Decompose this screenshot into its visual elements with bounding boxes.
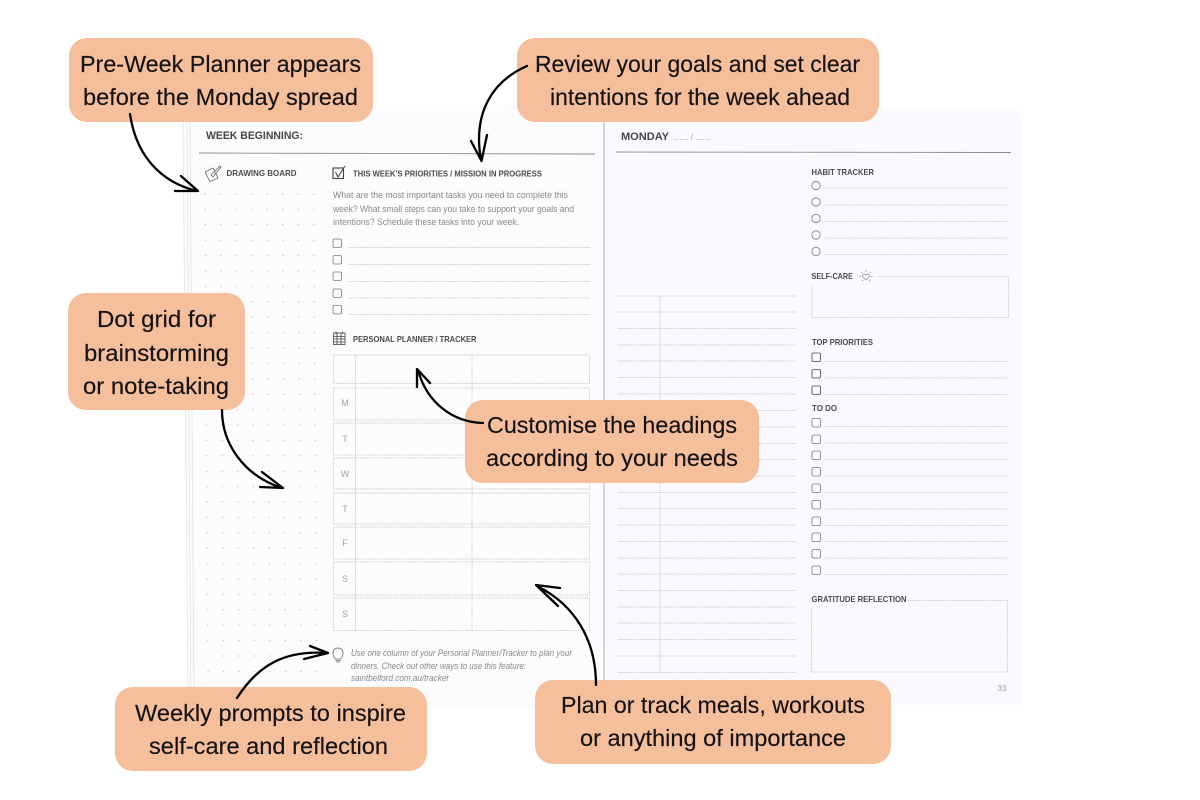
callout: review goals <box>517 38 879 122</box>
planner table: W <box>341 469 350 479</box>
self-care box: SELF-CARE <box>812 271 853 281</box>
planner spread <box>183 105 1021 707</box>
personal planner section: PERSONAL PLANNER / TRACKER <box>353 334 476 344</box>
top priorities <box>812 337 1008 394</box>
to do list <box>812 403 1008 574</box>
callout: customise headings: Customise the headings <box>487 412 737 438</box>
left page <box>183 105 604 707</box>
gratitude reflection box <box>812 594 1008 672</box>
drawing board section: DRAWING BOARD <box>226 168 296 178</box>
page number: 33 <box>998 684 1007 693</box>
planner table: T <box>342 504 348 514</box>
icon: light bulb <box>333 648 343 662</box>
arrow: pre-week planner to left page <box>130 114 198 191</box>
top priorities: TOP PRIORITIES <box>812 337 873 347</box>
callout: weekly prompts: self-care and reflection <box>149 733 388 759</box>
icon: pencil on paper <box>205 166 221 182</box>
priorities prompt: intentions? Schedule these tasks into your week. <box>333 216 519 227</box>
icon: sun with heart <box>860 270 872 281</box>
callout: dot grid: or note-taking <box>83 373 229 399</box>
icon: calendar <box>334 332 345 344</box>
weekly prompt <box>333 648 573 683</box>
right page: ....... / ....... <box>673 133 711 142</box>
priorities section <box>332 166 590 314</box>
self-care box <box>812 270 1008 318</box>
priorities checklist <box>333 239 590 314</box>
arrow: review goals to priorities <box>471 66 527 161</box>
arrow: customise callout to headings <box>417 369 483 423</box>
priorities prompt: What are the most important tasks you need to complete this <box>333 189 568 200</box>
personal planner section <box>334 332 590 630</box>
callout: weekly prompts <box>115 687 427 771</box>
callout: dot grid <box>68 293 245 410</box>
callout: plan or track: Plan or track meals, workouts <box>561 692 865 718</box>
weekly prompt: saintbelford.com.au/tracker <box>351 673 450 683</box>
weekly prompt: Use one column of your Personal Planner/Tracker to plan your <box>351 648 573 658</box>
callout: plan or track <box>535 680 891 764</box>
habit tracker <box>812 167 1008 256</box>
priorities section: THIS WEEK'S PRIORITIES / MISSION IN PROGRESS <box>353 168 542 178</box>
drawing board section <box>200 166 320 680</box>
right page <box>604 109 1021 705</box>
habit tracker: HABIT TRACKER <box>812 167 874 177</box>
gratitude reflection box: GRATITUDE REFLECTION <box>812 594 906 604</box>
callout: customise headings: according to your needs <box>486 445 738 471</box>
priorities prompt <box>332 189 574 227</box>
to do list: TO DO <box>812 403 837 413</box>
icon: ticked checkbox <box>333 166 345 178</box>
dot grid <box>200 188 320 680</box>
callout: pre-week planner <box>69 38 373 122</box>
weekly prompt: dinners. Check out other ways to use this feature: <box>351 661 526 671</box>
planner table: M <box>341 398 349 408</box>
callout: customise headings <box>465 400 759 483</box>
arrow: dot grid callout to grid <box>222 410 283 488</box>
callout: dot grid: brainstorming <box>84 340 229 366</box>
arrow: plan callout to table <box>536 585 596 685</box>
callout: review goals: Review your goals and set clear <box>535 51 860 77</box>
callout: plan or track: or anything of importance <box>580 725 846 751</box>
planner table: F <box>342 538 348 548</box>
callout: review goals: intentions for the week ahead <box>550 84 850 110</box>
schedule lines <box>618 296 796 672</box>
callout: dot grid: Dot grid for <box>97 306 216 332</box>
callout: pre-week planner: Pre-Week Planner appears <box>80 51 361 77</box>
priorities prompt: week? What small steps can you take to support your goals and <box>332 203 574 214</box>
callout: weekly prompts: Weekly prompts to inspire <box>135 700 406 726</box>
planner table <box>334 355 590 630</box>
planner table: S <box>342 609 348 619</box>
callout: pre-week planner: before the Monday spread <box>83 84 358 110</box>
arrow: weekly prompts to bulb <box>237 646 328 698</box>
planner table: S <box>342 574 348 584</box>
left page heading: WEEK BEGINNING: <box>206 130 303 142</box>
right page heading: MONDAY <box>621 131 669 143</box>
planner table: T <box>342 434 348 444</box>
